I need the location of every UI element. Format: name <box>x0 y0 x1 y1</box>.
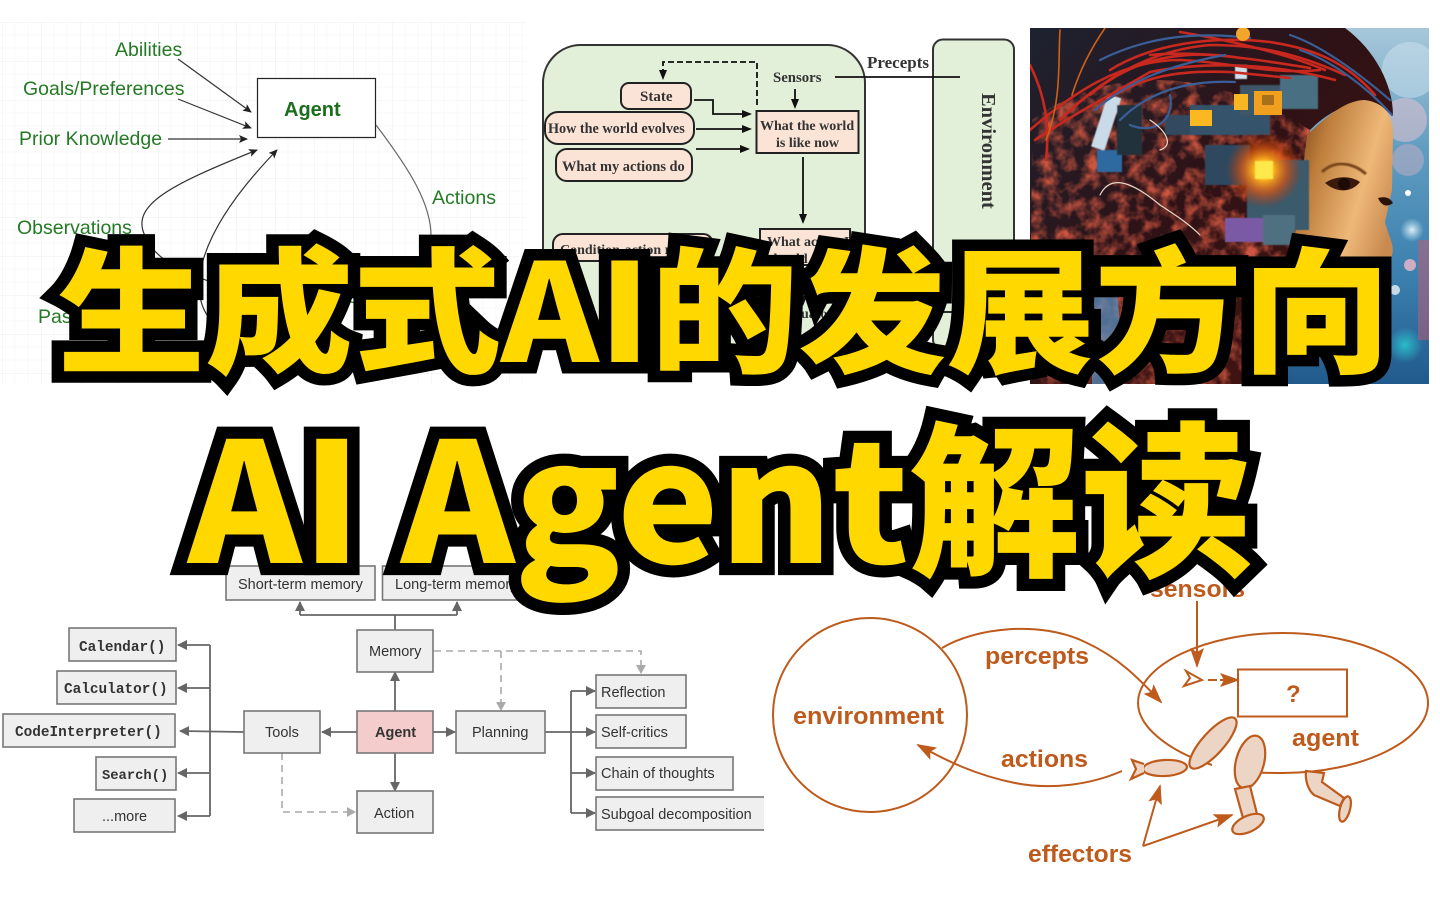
sketch labels: actions <box>1001 746 1088 773</box>
memory boxes: Long-term memory <box>395 577 518 593</box>
panel: AI robot head illustration <box>1030 27 1438 384</box>
input labels: Prior Knowledge <box>19 128 162 150</box>
input labels: Environment <box>265 286 375 308</box>
memory boxes: Short-term memory <box>238 577 364 593</box>
agent core boxes: Planning <box>472 725 528 741</box>
sketch labels: effectors <box>1028 841 1132 868</box>
sketch labels: environment <box>793 703 944 730</box>
environment box <box>933 40 1014 350</box>
reflex flow labels: Sensors <box>773 70 822 86</box>
effector arrows <box>1143 786 1232 846</box>
panel: agent inputs diagram <box>0 22 526 385</box>
effector limbs <box>1131 711 1353 838</box>
reflex flow labels <box>773 53 929 86</box>
memory boxes: Memory <box>369 644 422 660</box>
agent core boxes: Agent <box>375 725 416 741</box>
agent box: Agent <box>284 99 341 121</box>
box text: What my actions do <box>562 159 685 175</box>
box text: What the world <box>760 119 854 134</box>
input labels: Observations <box>17 217 132 239</box>
memory boxes <box>226 566 532 672</box>
box text <box>548 89 854 322</box>
planning boxes: Chain of thoughts <box>601 766 715 782</box>
planning boxes: Self-critics <box>601 725 668 741</box>
sketch labels <box>793 576 1359 868</box>
percept box with question mark: ? <box>1286 681 1301 708</box>
input labels: Goals/Preferences <box>23 78 185 100</box>
red circuit texture <box>1030 80 1310 384</box>
planning boxes <box>596 675 771 830</box>
sensor eye <box>1184 671 1238 686</box>
box text: should do <box>768 252 826 267</box>
input labels: Abilities <box>115 39 182 61</box>
actions arrow <box>918 745 1122 786</box>
agent core boxes: Tools <box>265 725 299 741</box>
panel: model-based reflex agent diagram <box>543 40 1014 354</box>
agent container <box>543 45 865 354</box>
agent ellipse <box>1138 633 1428 773</box>
title line 1: 生成式AI的发展方向 <box>57 204 1390 401</box>
panel: LLM agent components flowchart <box>3 566 771 833</box>
sketch labels: percepts <box>985 643 1089 670</box>
flow arrows <box>663 62 975 312</box>
panel: environment agent loop sketch <box>773 576 1428 868</box>
tool boxes: Calculator() <box>64 682 168 698</box>
title line 2: AI Agent解读 <box>186 369 1253 611</box>
environment circle <box>773 618 967 812</box>
box text: Condition-action rules <box>560 243 695 258</box>
agent core boxes <box>244 711 545 833</box>
sketch labels: sensors <box>1150 576 1245 603</box>
red wires <box>1030 28 1392 235</box>
blue patch at lower head <box>1092 291 1124 384</box>
box text: State <box>640 89 673 105</box>
planning boxes: Subgoal decomposition <box>601 807 752 823</box>
input arrows <box>142 59 431 345</box>
environment box: Environment <box>977 93 999 209</box>
tool boxes: Calendar() <box>79 640 165 656</box>
bokeh background <box>1382 42 1429 362</box>
reflex flow labels: Precepts <box>867 53 929 72</box>
circuit boards <box>1091 65 1318 245</box>
tool boxes: ...more <box>102 809 147 825</box>
agent box <box>258 78 376 138</box>
percepts arrow <box>942 629 1161 702</box>
box text: What action I <box>767 235 849 250</box>
tool boxes: Search() <box>102 768 168 784</box>
planning boxes: Reflection <box>601 685 665 701</box>
glowing chips <box>1190 27 1302 208</box>
state boxes <box>545 83 858 265</box>
tool boxes: CodeInterpreter() <box>15 725 162 741</box>
box text: Actuators <box>780 307 840 322</box>
input labels: Past Experiences <box>38 306 190 328</box>
tool boxes <box>3 628 176 832</box>
connector lines <box>178 602 641 816</box>
sensors arrow <box>1196 601 1198 666</box>
input labels <box>17 39 496 328</box>
box text: is like now <box>776 136 840 151</box>
face <box>1295 100 1393 256</box>
percept box with question mark <box>1238 670 1347 716</box>
box text: How the world evolves <box>548 121 685 137</box>
input labels: Actions <box>432 187 496 209</box>
sketch labels: agent <box>1292 725 1359 752</box>
agent core boxes: Action <box>374 806 414 822</box>
head mass <box>1030 28 1393 384</box>
